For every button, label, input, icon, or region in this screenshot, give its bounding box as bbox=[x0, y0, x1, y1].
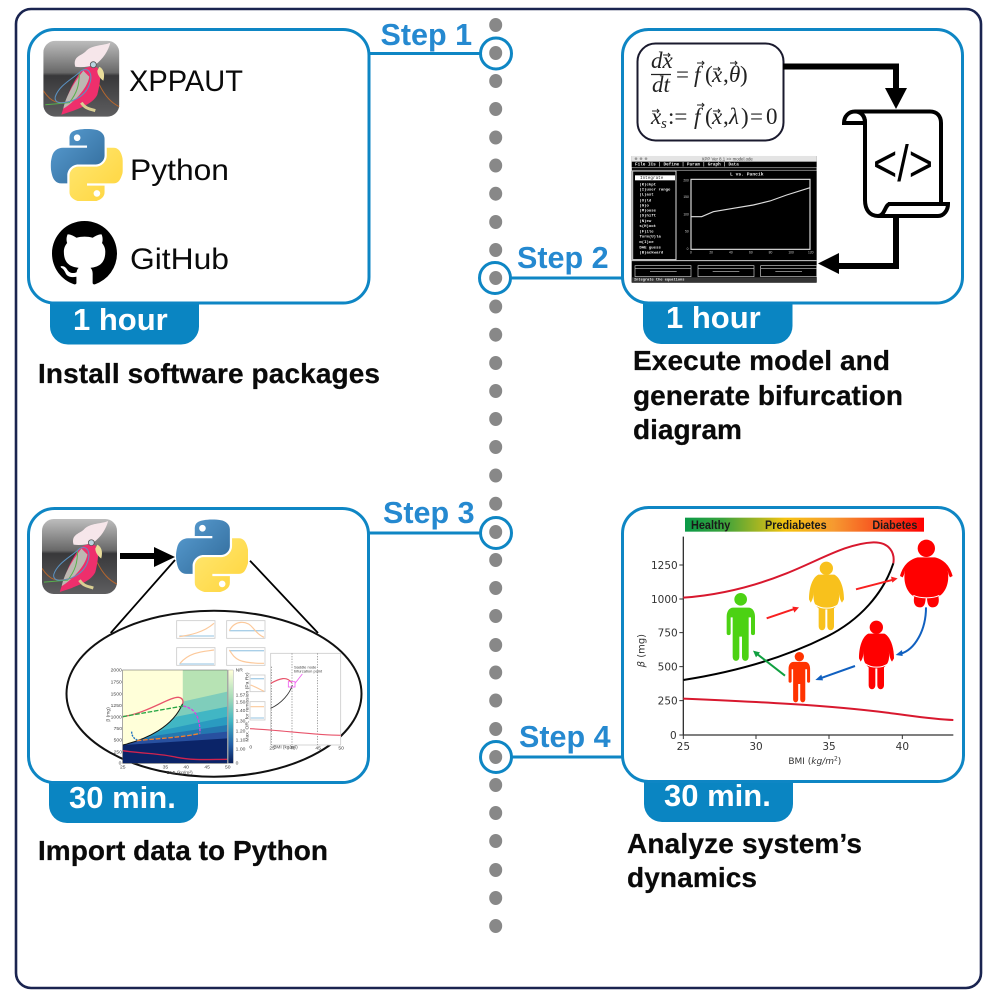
legend bar: Prediabetes bbox=[765, 518, 827, 532]
saddle node plot: 25 bbox=[269, 745, 275, 751]
step 4 bbox=[480, 508, 964, 893]
step 2 time badge bbox=[643, 300, 792, 344]
XPP screenshot: 0 bbox=[690, 250, 692, 254]
step 1 caption: Install software packages bbox=[38, 358, 380, 389]
equations box: , bbox=[723, 104, 729, 129]
equations box: dx bbox=[651, 48, 674, 73]
step 3 bbox=[28, 496, 512, 866]
bifurcation chart: 0 bbox=[670, 730, 677, 742]
icon: Python bbox=[176, 520, 249, 593]
bifurcation heat map: 1.30 bbox=[236, 719, 246, 725]
step 1 duration: 1 hour bbox=[73, 302, 168, 337]
saddle node plot: BMI (kg/m²) bbox=[273, 744, 298, 749]
figure: prediabetic yellow person bbox=[809, 562, 844, 630]
legend bar: Diabetes bbox=[872, 518, 918, 532]
equations box: x bbox=[711, 104, 723, 129]
XPP screenshot: (B)ackward bbox=[639, 250, 664, 255]
bifurcation heat map: 1000 bbox=[111, 714, 122, 720]
equations box: ) bbox=[741, 104, 749, 129]
figure: healthy green person bbox=[727, 593, 755, 661]
XPP screenshot: 60 bbox=[749, 250, 753, 254]
XPP screenshot: 0 bbox=[687, 247, 689, 251]
step 1 label: Step 1 bbox=[380, 18, 472, 52]
equations box: dt bbox=[652, 72, 670, 97]
XPP screenshot: (M)ouse bbox=[639, 209, 657, 214]
equations box: s bbox=[661, 116, 667, 132]
step 2 caption: Execute model and bbox=[633, 345, 890, 376]
XPP screenshot: L vs. Pancik bbox=[730, 172, 764, 178]
equations box: x bbox=[650, 104, 662, 129]
XPP screenshot: (O)ld bbox=[639, 198, 652, 203]
equations box: := bbox=[668, 104, 687, 129]
XPP screenshot: DAE guess bbox=[639, 246, 661, 250]
panel: execute model bbox=[622, 30, 962, 303]
XPP screenshot: 40 bbox=[729, 250, 733, 254]
XPP screenshot: form(U)la bbox=[639, 235, 661, 240]
bifurcation heat map: 1.20 bbox=[236, 729, 246, 735]
step 2 duration: 1 hour bbox=[666, 300, 761, 335]
bifurcation chart: 500 bbox=[658, 662, 678, 674]
step 4 duration: 30 min. bbox=[664, 778, 771, 813]
figure: small orange-red person bbox=[789, 652, 810, 702]
equations box bbox=[638, 44, 784, 140]
step 4 time badge bbox=[644, 778, 793, 822]
arrow: prediabetes to diabetes bbox=[856, 577, 898, 589]
equations box: f bbox=[694, 62, 704, 87]
bifurcation chart: 250 bbox=[658, 696, 678, 708]
icon: code scroll: </> bbox=[873, 135, 933, 192]
XPP screenshot: 50 bbox=[685, 229, 689, 233]
XPP screenshot: s(H)oot bbox=[639, 224, 657, 229]
bifurcation chart: 1000 bbox=[651, 594, 678, 606]
icon: XPPAUT bbox=[43, 41, 119, 117]
panel: analyze dynamics bbox=[622, 508, 964, 782]
bifurcation heat map bbox=[105, 668, 250, 776]
zoom lines bbox=[111, 560, 318, 633]
bifurcation heat map: 2000 bbox=[111, 668, 122, 674]
bifurcation heat map: BMI (kg/m²) bbox=[167, 770, 193, 776]
XPP screenshot: 80 bbox=[769, 250, 773, 254]
arrow: healthy to prediabetes bbox=[767, 607, 799, 618]
bifurcation chart: 30 bbox=[749, 741, 763, 753]
panel: install software bbox=[28, 30, 369, 303]
XPP screenshot: m(I)ce bbox=[639, 240, 654, 245]
bifurcation heat map: 1.10 bbox=[236, 737, 246, 743]
XPP screenshot bbox=[632, 156, 817, 283]
arrow: further weight loss bbox=[815, 666, 855, 680]
bifurcation heat map: 1.00 bbox=[236, 747, 246, 753]
bifurcation heat map: 1250 bbox=[111, 703, 122, 709]
step 1 bbox=[28, 18, 512, 389]
bifurcation chart: BMI (kg/m bbox=[788, 757, 834, 767]
XPP screenshot: Integrate the equations bbox=[634, 278, 684, 283]
step 2 caption bbox=[633, 345, 903, 445]
saddle node plot bbox=[249, 653, 344, 751]
saddle node plot: bifurcation point bbox=[294, 669, 323, 674]
bifurcation heat map: 1.57 bbox=[236, 693, 246, 699]
legend bar: Healthy bbox=[691, 518, 731, 532]
equations box: f bbox=[694, 104, 704, 129]
arrowhead: code to simulation bbox=[818, 253, 839, 274]
icon: GitHub bbox=[52, 221, 117, 284]
legend bar bbox=[685, 518, 924, 532]
bifurcation chart: β (mg) bbox=[636, 634, 647, 668]
step 2 marker bbox=[480, 262, 510, 294]
label: XPPAUT: XPPAUT bbox=[129, 65, 243, 98]
equations box: ) bbox=[740, 62, 748, 87]
XPP screenshot: (G)o bbox=[639, 204, 650, 209]
bifurcation heat map: 500 bbox=[114, 738, 122, 744]
bifurcation heat map: 50 bbox=[225, 765, 231, 771]
bifurcation chart: 750 bbox=[658, 628, 678, 640]
step 1 time badge bbox=[50, 300, 199, 344]
small time-series plots bbox=[177, 621, 265, 720]
step 2 caption: generate bifurcation bbox=[633, 380, 903, 411]
bifurcation chart: 25 bbox=[677, 741, 690, 753]
bifurcation heat map: NR bbox=[236, 668, 243, 674]
XPP screenshot: Integrate bbox=[640, 176, 664, 181]
bifurcation chart: 2 bbox=[834, 756, 838, 763]
equations box: ( bbox=[705, 62, 713, 87]
icon: code scroll bbox=[844, 112, 948, 216]
saddle node plot: 50 bbox=[338, 745, 344, 751]
XPP screenshot: 20 bbox=[709, 250, 713, 254]
arrowhead: equations to code bbox=[885, 88, 907, 109]
XPP screenshot: 100 bbox=[683, 213, 689, 217]
XPP screenshot: File ICs | Define | Param | Graph | Data bbox=[635, 162, 739, 167]
equations box: = bbox=[676, 62, 689, 87]
XPP screenshot: 120 bbox=[808, 250, 814, 254]
figure: diabetic large red person bbox=[900, 540, 953, 607]
XPP screenshot: (I)user range bbox=[639, 188, 671, 193]
arrow: XPPAUT to Python bbox=[120, 547, 175, 567]
bifurcation heat map: 1500 bbox=[111, 691, 122, 697]
bifurcation heat map: 1.40 bbox=[236, 708, 246, 714]
timeline dots bbox=[489, 18, 502, 933]
equations box: x bbox=[711, 62, 723, 87]
equations box: = bbox=[750, 104, 763, 129]
saddle node plot: 40 bbox=[290, 745, 296, 751]
step 2 connector bbox=[510, 276, 622, 280]
step 3 time badge bbox=[49, 779, 198, 823]
bifurcation heat map: 25 bbox=[120, 765, 126, 771]
step 3 caption: Import data to Python bbox=[38, 835, 328, 866]
bifurcation heat map: β (mg) bbox=[105, 707, 111, 722]
saddle node plot: Saddle node bbox=[294, 665, 317, 670]
step 1 marker bbox=[480, 38, 512, 69]
step 4 caption: dynamics bbox=[627, 862, 757, 893]
step 4 caption: Analyze system’s bbox=[627, 828, 862, 859]
step 4 connector bbox=[511, 756, 623, 758]
step 4 label: Step 4 bbox=[519, 720, 611, 754]
step 3 label: Step 3 bbox=[383, 496, 475, 530]
label: Python: Python bbox=[130, 154, 229, 187]
equations box: , bbox=[723, 62, 729, 87]
label: GitHub: GitHub bbox=[130, 243, 229, 276]
icon: Python bbox=[51, 129, 123, 203]
arrow: weight loss curve bbox=[896, 607, 926, 656]
panel: import data bbox=[28, 508, 368, 782]
XPP screenshot: (L)ast bbox=[639, 193, 654, 198]
arrow: equations to code bbox=[783, 66, 896, 90]
equations box: λ bbox=[728, 104, 739, 129]
equations box: ( bbox=[705, 104, 713, 129]
step 2 caption: diagram bbox=[633, 414, 742, 445]
bifurcation chart: 1250 bbox=[651, 560, 678, 572]
bifurcation heat map: 0 bbox=[119, 760, 122, 766]
step 3 duration: 30 min. bbox=[69, 780, 176, 815]
bifurcation heat map: 1.50 bbox=[236, 699, 246, 705]
equations box: θ bbox=[729, 62, 740, 87]
bifurcation chart bbox=[636, 537, 953, 767]
bifurcation heat map: 40 bbox=[183, 765, 189, 771]
step 4 caption bbox=[627, 828, 862, 893]
step 3 marker bbox=[480, 518, 512, 548]
step 4 marker bbox=[480, 742, 512, 772]
bifurcation heat map: 750 bbox=[114, 726, 122, 732]
bifurcation chart: 35 bbox=[822, 741, 836, 753]
equations box: 0 bbox=[766, 104, 778, 129]
step 2 bbox=[480, 30, 962, 445]
XPP screenshot: (N)ew bbox=[639, 219, 652, 224]
bifurcation heat map: Max. OR, for remission (Pa Rx) bbox=[244, 672, 250, 742]
bifurcation heat map: 45 bbox=[204, 765, 210, 771]
bifurcation chart: ) bbox=[838, 757, 841, 767]
XPP screenshot: 100 bbox=[788, 250, 794, 254]
bifurcation heat map: 1750 bbox=[111, 680, 122, 686]
bifurcation chart: 40 bbox=[896, 741, 909, 753]
saddle node plot: 0 bbox=[249, 744, 252, 750]
XPP screenshot: (K)ckpt bbox=[639, 183, 657, 188]
bifurcation heat map: 35 bbox=[163, 765, 168, 771]
XPP screenshot: 150 bbox=[683, 195, 689, 199]
figure: recovering red person bbox=[859, 621, 894, 689]
XPP screenshot: XPP Ver 8.1 >> model.ode bbox=[702, 156, 753, 161]
arrow: code to simulation bbox=[836, 216, 896, 266]
step 1 connector bbox=[369, 52, 481, 55]
bifurcation heat map: 250 bbox=[114, 749, 122, 755]
zoom ellipse with plots bbox=[66, 611, 362, 777]
icon: XPPAUT bbox=[42, 519, 117, 594]
arrow: return to healthy bbox=[753, 651, 785, 676]
XPP screenshot: (S)hift bbox=[639, 214, 657, 219]
step 2 label: Step 2 bbox=[517, 241, 609, 275]
XPP screenshot: (F)ile bbox=[639, 229, 654, 234]
step 3 connector bbox=[369, 532, 481, 534]
XPP screenshot: 200 bbox=[683, 178, 689, 182]
bifurcation heat map: 0 bbox=[236, 760, 239, 766]
saddle node plot: 45 bbox=[315, 745, 321, 751]
